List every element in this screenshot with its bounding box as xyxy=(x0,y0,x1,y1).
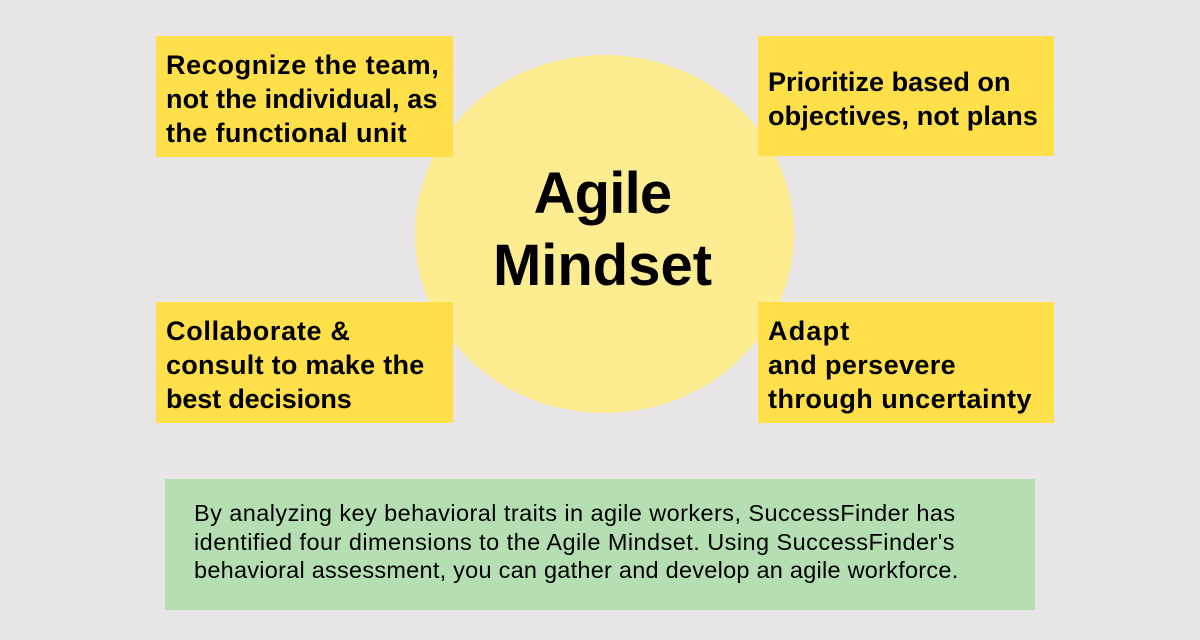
box: adapt: through uncertainty xyxy=(768,384,1032,414)
description panel: By analyzing key behavioral traits in agile workers, SuccessFinder has xyxy=(194,500,956,526)
central circle xyxy=(415,55,794,413)
description panel: behavioral assessment, you can gather and develop an agile workforce. xyxy=(194,557,958,583)
box: prioritize: Prioritize based on xyxy=(768,67,1010,97)
box: collaborate: Collaborate & xyxy=(166,316,351,346)
title xyxy=(493,161,712,298)
box: adapt: and persevere xyxy=(768,350,956,380)
box: collaborate: best decisions xyxy=(166,384,352,414)
box: recognize the team: not the individual, as xyxy=(166,84,438,114)
box: prioritize xyxy=(758,36,1054,156)
box: recognize the team xyxy=(156,36,453,157)
box: adapt: Adapt xyxy=(768,316,850,346)
title: Agile xyxy=(534,161,671,226)
title: Mindset xyxy=(493,233,712,298)
box: prioritize: objectives, not plans xyxy=(768,101,1038,131)
box: collaborate xyxy=(156,302,453,423)
box: recognize the team: Recognize the team, xyxy=(166,50,439,80)
box: recognize the team: the functional unit xyxy=(166,118,407,148)
box: collaborate: consult to make the xyxy=(166,350,424,380)
description panel: identified four dimensions to the Agile Mindset. Using SuccessFinder's xyxy=(194,528,955,554)
box: adapt xyxy=(758,302,1054,423)
description panel xyxy=(165,479,1035,610)
